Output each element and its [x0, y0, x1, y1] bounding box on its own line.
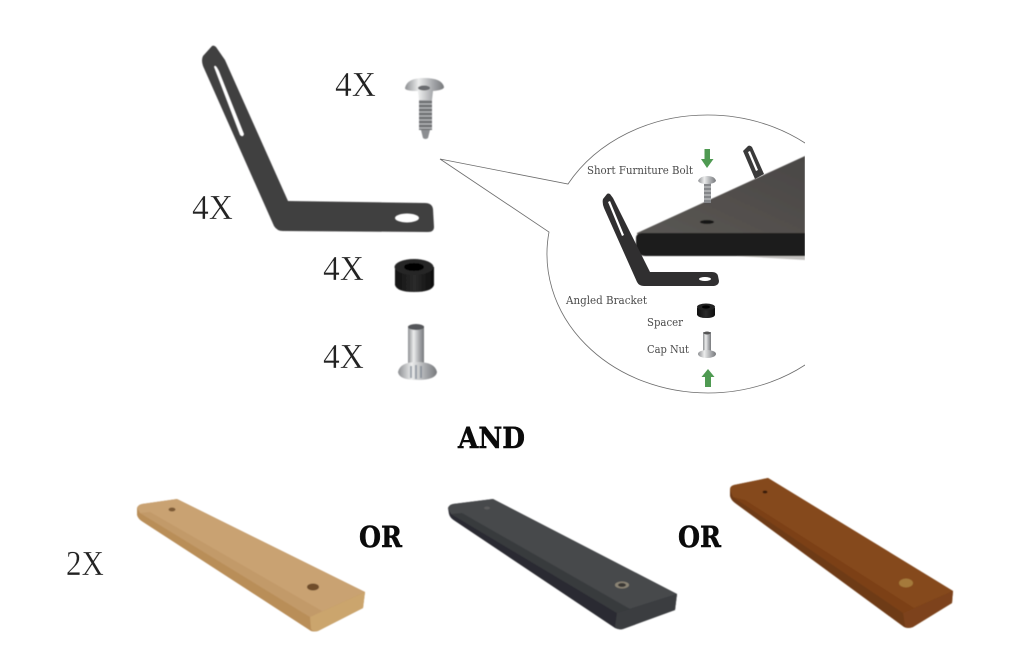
green arrow down — [701, 149, 714, 168]
OR label 1: OR — [359, 520, 403, 554]
small bolt — [698, 176, 716, 203]
quantity: bracket: 4X — [192, 188, 233, 227]
small cap nut — [698, 332, 716, 358]
quantity: bolt: 4X — [335, 65, 376, 104]
small angled bracket — [603, 194, 719, 286]
label: angled bracket: Angled Bracket — [565, 294, 648, 307]
quantity: boards: 2X — [66, 544, 104, 583]
label: cap nut: Cap Nut — [647, 343, 690, 356]
table top — [636, 156, 805, 260]
quantity: cap nut: 4X — [323, 337, 364, 376]
far bracket arm — [743, 146, 764, 179]
label: short furniture bolt: Short Furniture Bolt — [587, 164, 694, 177]
board: walnut — [730, 478, 953, 628]
icon: cap nut — [398, 324, 437, 380]
callout: assembly detail — [440, 114, 805, 394]
board: natural bamboo — [137, 499, 365, 632]
OR label 2: OR — [678, 520, 722, 554]
large angled bracket — [202, 46, 434, 232]
AND heading: AND — [457, 421, 525, 455]
callout outline — [440, 114, 805, 394]
icon: rubber spacer — [394, 259, 434, 292]
quantity: spacer: 4X — [323, 249, 364, 288]
small spacer — [697, 304, 715, 318]
label: spacer: Spacer — [647, 316, 684, 329]
icon: furniture bolt — [405, 78, 444, 139]
board: charcoal — [448, 499, 677, 629]
infographic — [67, 44, 954, 632]
green arrow up — [702, 369, 714, 387]
